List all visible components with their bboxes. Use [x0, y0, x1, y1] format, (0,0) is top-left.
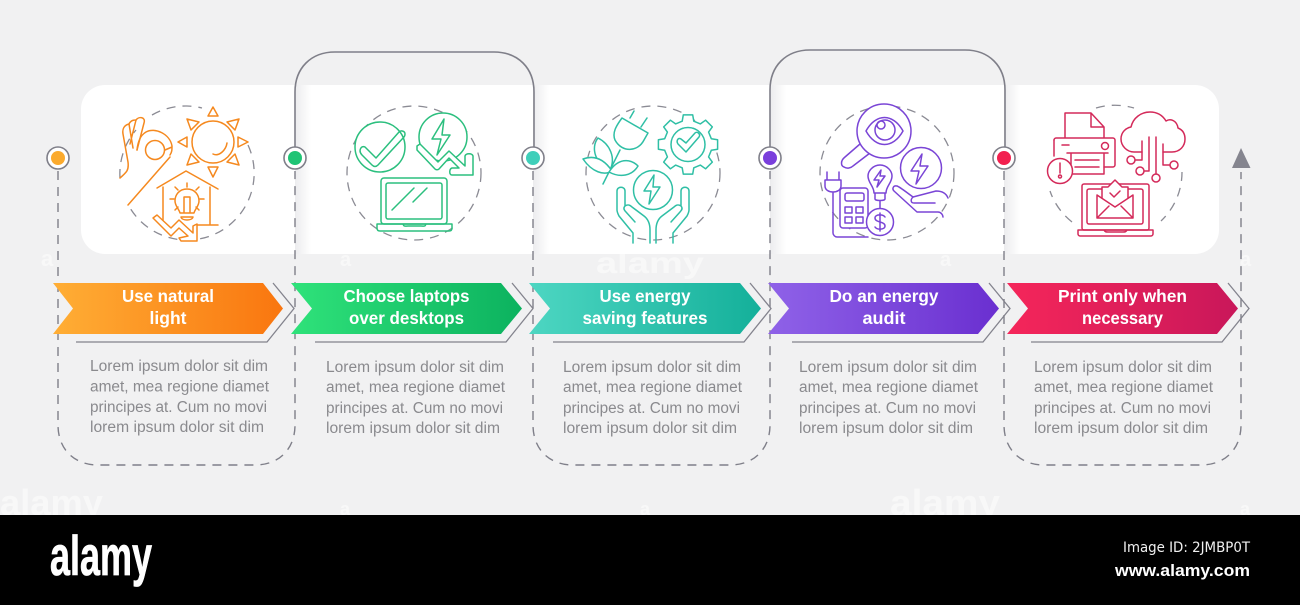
site url: www.alamy.com — [1114, 561, 1250, 580]
description: lorem ipsum dolor sit dim — [563, 420, 737, 437]
icon: energy audit — [820, 104, 954, 240]
description: amet, mea regione diamet — [326, 379, 506, 396]
description: principes at. Cum no movi — [799, 400, 976, 417]
watermarks: alamy — [890, 482, 1000, 523]
description: principes at. Cum no movi — [1034, 400, 1211, 417]
watermarks: a — [1240, 249, 1252, 271]
heading — [344, 286, 470, 328]
heading: light — [150, 308, 187, 328]
description: amet, mea regione diamet — [563, 379, 743, 396]
description: Lorem ipsum dolor sit dim — [1034, 359, 1212, 376]
description: amet, mea regione diamet — [90, 378, 270, 396]
chevron outline — [76, 283, 294, 342]
step 1: natural light — [53, 283, 294, 436]
chevron outline — [1031, 283, 1249, 342]
description: lorem ipsum dolor sit dim — [326, 420, 500, 437]
timeline connector: dashed bottom arcs — [58, 171, 1241, 465]
description: lorem ipsum dolor sit dim — [799, 420, 973, 437]
description — [326, 359, 506, 437]
chevron banner — [529, 283, 761, 334]
heading: over desktops — [349, 308, 464, 328]
image id: Image ID: 2JMBP0T — [1123, 540, 1250, 556]
chevron outline — [315, 283, 533, 342]
description: Lorem ipsum dolor sit dim — [326, 359, 504, 376]
heading — [582, 286, 708, 328]
description: amet, mea regione diamet — [1034, 379, 1214, 396]
heading — [122, 286, 214, 328]
description: Lorem ipsum dolor sit dim — [563, 359, 741, 376]
description: principes at. Cum no movi — [326, 400, 503, 417]
watermarks — [0, 246, 1252, 523]
icon: laptops — [347, 106, 481, 240]
icon: natural light — [120, 106, 254, 241]
description: principes at. Cum no movi — [90, 399, 267, 416]
step 2: laptops — [291, 283, 533, 437]
heading: necessary — [1082, 308, 1163, 328]
watermarks: alamy — [0, 482, 103, 523]
watermarks: a — [41, 246, 54, 271]
chevron banner — [1007, 283, 1238, 334]
description: principes at. Cum no movi — [563, 400, 740, 417]
heading: Use natural — [122, 286, 214, 306]
chevron outline — [553, 283, 771, 342]
chevron outline — [792, 283, 1010, 342]
description: amet, mea regione diamet — [799, 379, 979, 396]
timeline nodes — [47, 147, 1015, 169]
description: Lorem ipsum dolor sit dim — [90, 358, 268, 375]
step 4: energy audit — [768, 283, 1010, 437]
watermarks: a — [1240, 499, 1251, 519]
heading: saving features — [582, 308, 708, 328]
chevron banner — [291, 283, 522, 334]
arrow head — [1232, 148, 1250, 168]
watermarks: a — [640, 499, 651, 519]
heading: Print only when — [1058, 286, 1187, 306]
icon: print only when necessary — [1048, 105, 1185, 236]
watermarks: a — [940, 249, 952, 271]
step 5: print only when necessary — [1007, 283, 1249, 437]
watermarks: a — [340, 249, 352, 271]
heading — [830, 286, 939, 328]
heading: Choose laptops — [344, 286, 470, 306]
watermarks: alamy — [596, 247, 704, 280]
description — [1034, 359, 1214, 437]
heading: Use energy — [600, 286, 691, 306]
white icon panel — [81, 85, 1219, 254]
timeline connector: solid top arcs — [295, 50, 1005, 147]
heading: audit — [862, 308, 906, 328]
heading — [1058, 286, 1187, 328]
description: lorem ipsum dolor sit dim — [90, 419, 264, 436]
chevron banner — [768, 283, 999, 334]
step 3: energy saving features — [529, 283, 771, 437]
description: lorem ipsum dolor sit dim — [1034, 420, 1208, 437]
description — [90, 358, 270, 436]
description: Lorem ipsum dolor sit dim — [799, 359, 977, 376]
icon: energy saving features — [583, 106, 720, 243]
heading: Do an energy — [830, 286, 939, 306]
watermarks: a — [340, 499, 351, 519]
alamy logo: alamy — [50, 524, 152, 587]
footer bar — [0, 515, 1300, 605]
chevron banner — [53, 283, 283, 334]
description — [563, 359, 743, 437]
description — [799, 359, 979, 437]
